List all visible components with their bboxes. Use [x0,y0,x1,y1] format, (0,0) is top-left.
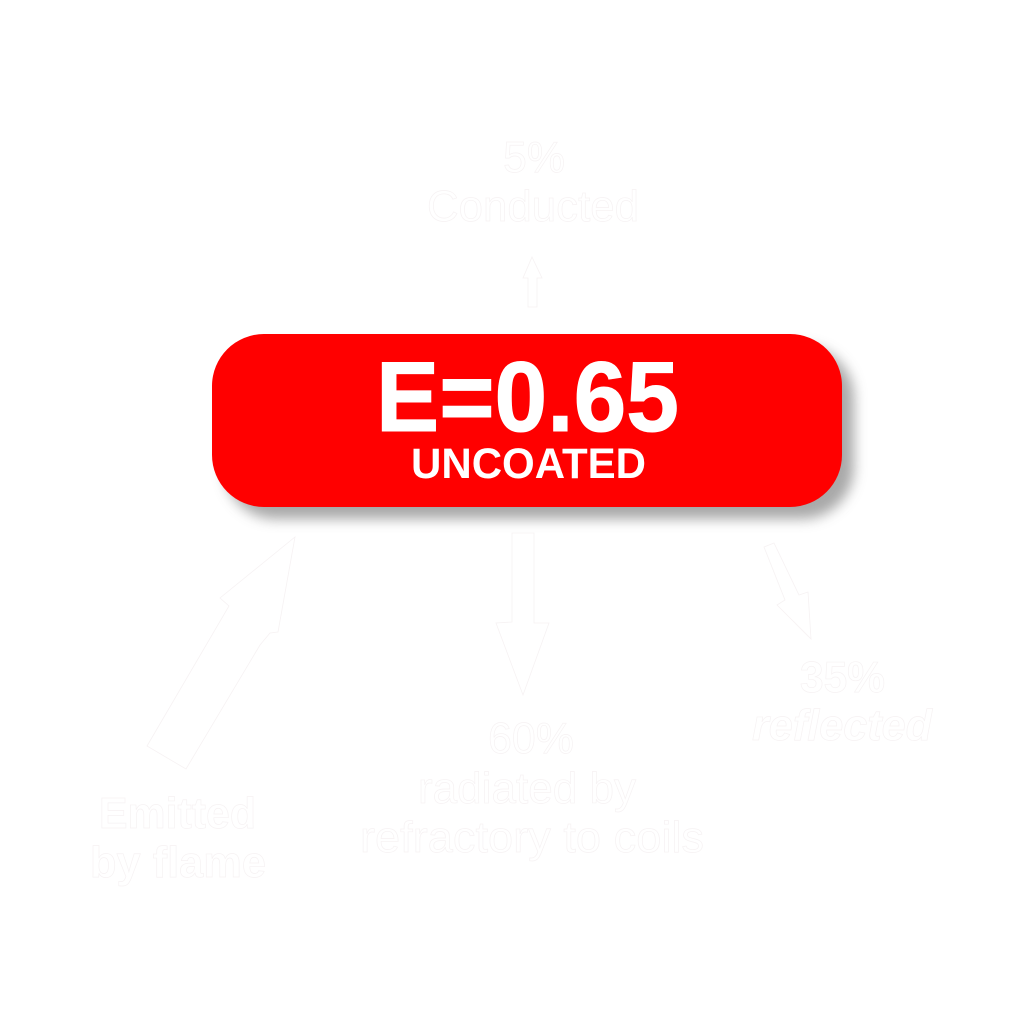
label: 35% reflected: 35% [800,653,885,702]
emissivity value: E=0.65 [376,341,679,452]
badge subtitle: UNCOATED [411,440,646,488]
label: 60% radiated by refractory to coils: refractory to coils [360,813,704,862]
panel: emissivity badge [212,334,854,519]
label: 60% radiated by refractory to coils: 60% [488,714,574,763]
badge body [212,334,842,507]
label: 35% reflected [752,653,933,750]
arrow: conducted up [523,257,542,307]
label: emitted by flame: Emitted [99,789,256,838]
arrow: emitted by flame [147,537,295,769]
label: 60% radiated by refractory to coils [360,714,704,862]
label: 35% reflected: reflected [752,701,933,750]
arrow: radiated to coils [496,533,549,695]
label: 5% conducted: Conducted [427,182,639,231]
label: 5% conducted: 5% [503,133,565,182]
label: 60% radiated by refractory to coils: radiated by [418,764,636,813]
label: emitted by flame [90,789,266,887]
label: 5% conducted [427,133,639,231]
badge shadow [224,346,854,519]
arrow: reflected [764,543,811,639]
label: emitted by flame: by flame [90,838,266,887]
